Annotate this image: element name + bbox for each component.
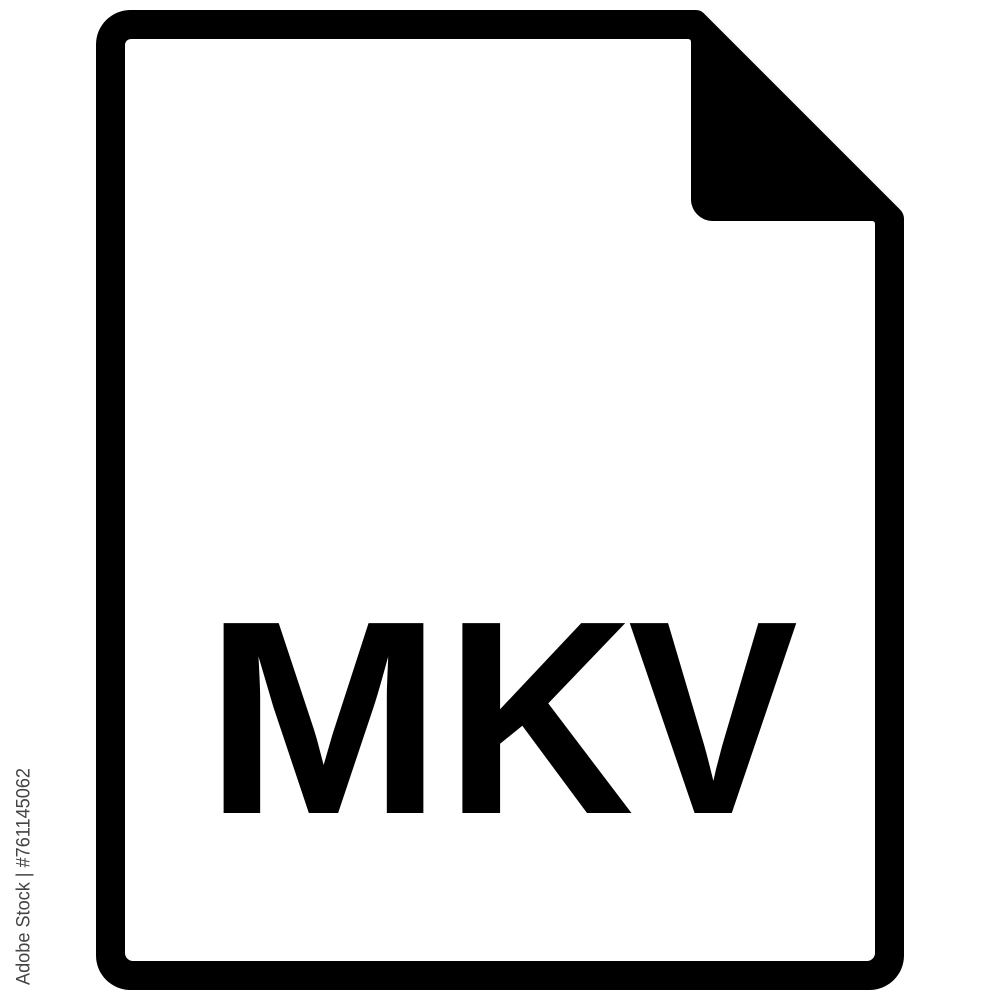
label: MKV: K: [445, 564, 634, 872]
icon: document outline: [96, 10, 904, 990]
icon: folded corner: [691, 39, 875, 221]
label: MKV: M: [204, 564, 442, 872]
stock id: Adobe Stock | #761145062: [12, 768, 34, 985]
label: MKV: V: [628, 564, 799, 872]
